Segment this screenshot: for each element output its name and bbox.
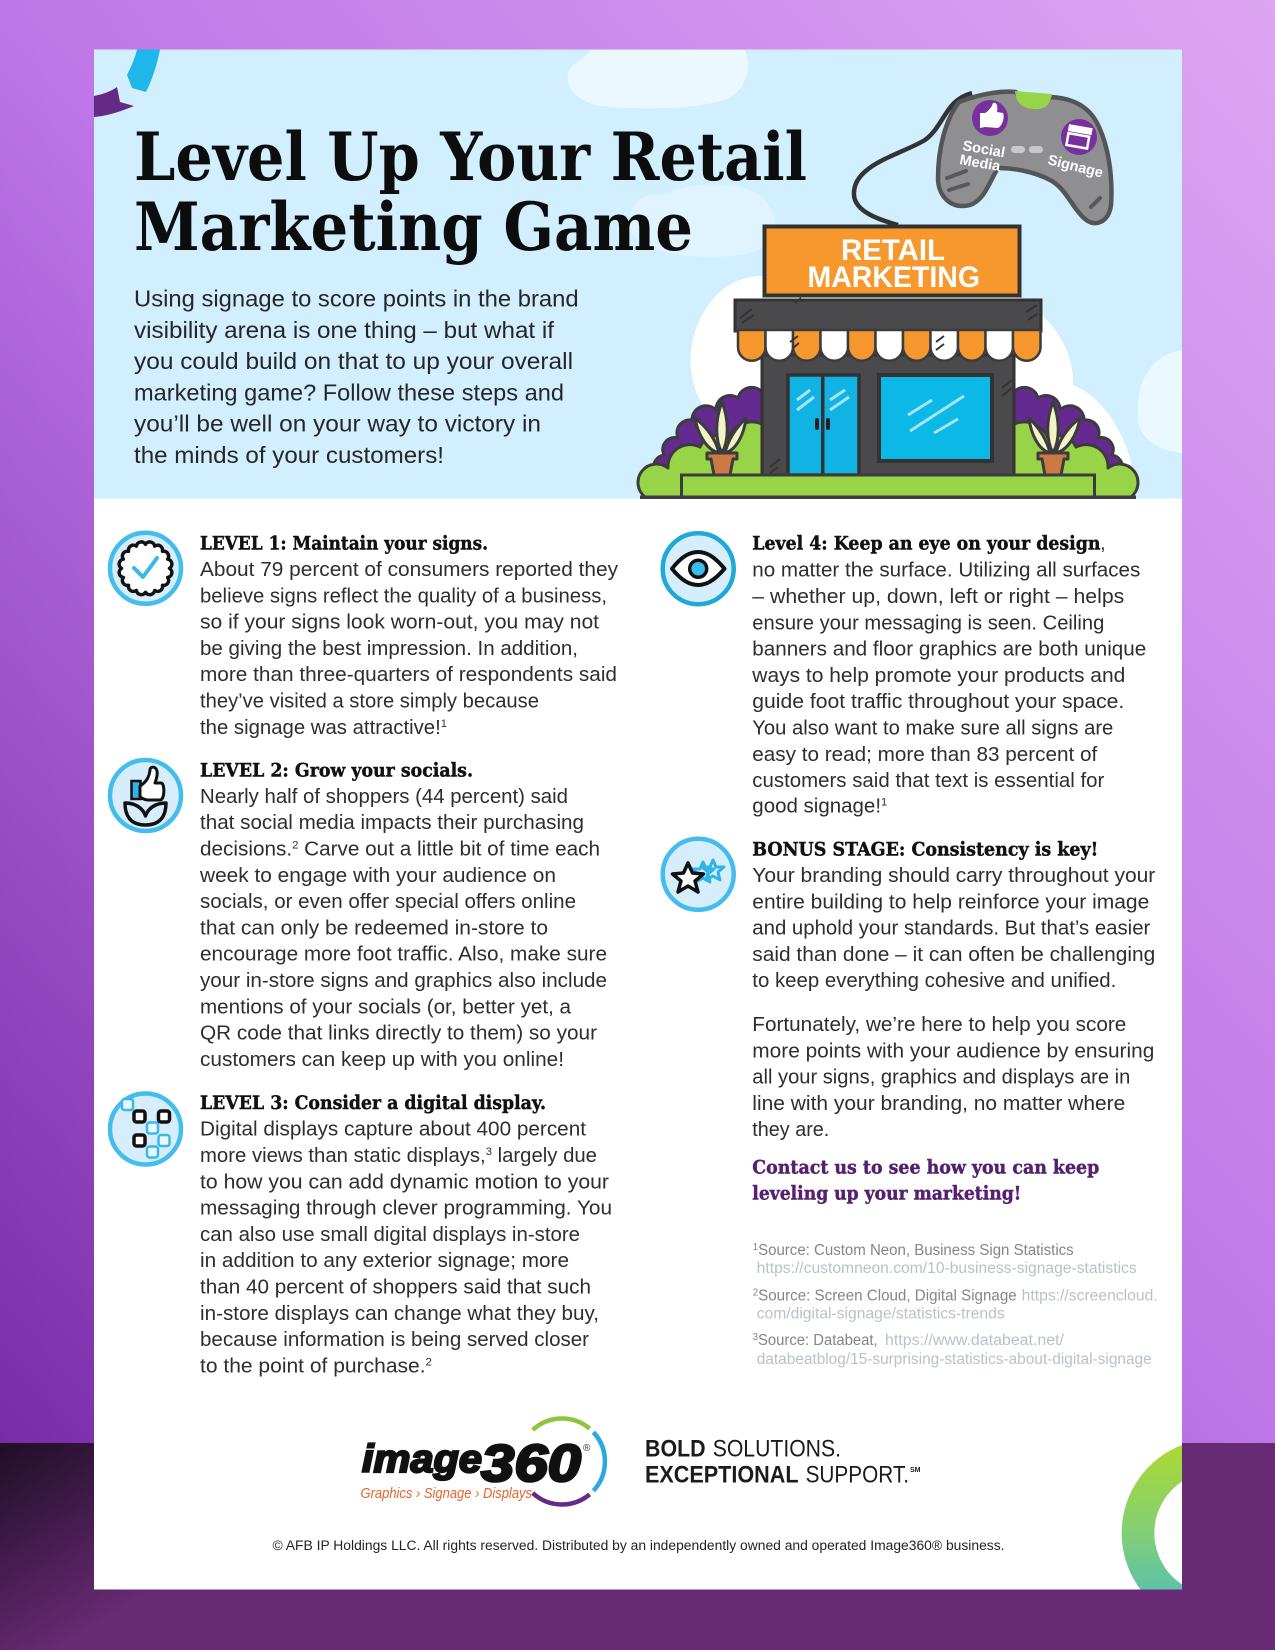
level 4 text: Level 4: Keep an eye on your design, <box>752 532 1105 554</box>
intro text: you’ll be well on your way to victory in <box>134 411 541 437</box>
level 4 text: ensure your messaging is seen. Ceiling <box>752 612 1104 634</box>
closing paragraph <box>752 1014 1154 1141</box>
level 4 text: – whether up, down, left or right – helps <box>752 586 1124 608</box>
background: dark floor <box>0 1443 1275 1650</box>
level 2 text: Nearly half of shoppers (44 percent) said <box>200 786 568 808</box>
sources: Source: Screen Cloud, Digital Signage <box>758 1288 1017 1305</box>
bushes left <box>638 387 762 497</box>
level 2 text: socials, or even offer special offers online <box>200 891 576 913</box>
tagline: SUPPORT. <box>806 1462 909 1489</box>
closing paragraph: Fortunately, we’re here to help you score <box>752 1014 1126 1036</box>
level 3 text: to how you can add dynamic motion to your <box>200 1171 609 1193</box>
level 1 text: believe signs reflect the quality of a business, <box>200 585 607 607</box>
intro text: you could build on that to up your overall <box>134 348 573 374</box>
icon: eye <box>663 533 734 604</box>
bonus stage text: entire building to help reinforce your image <box>752 891 1149 913</box>
level 3 text: largely due <box>492 1145 597 1167</box>
potted plant right <box>1029 402 1080 475</box>
icon: QR code squares <box>110 1094 181 1164</box>
level 4 block <box>663 532 1146 818</box>
level 4 text: 1 <box>881 797 887 809</box>
corner ring: green to teal <box>1122 1445 1182 1590</box>
building <box>762 355 1014 475</box>
level 4 text: good signage! <box>752 796 878 818</box>
white cloud behind store <box>640 276 1136 497</box>
sources: 1 <box>753 1242 759 1253</box>
roof band <box>735 300 1041 331</box>
level 3 text <box>200 1092 612 1377</box>
level 3 text: than 40 percent of shoppers said that such <box>200 1276 591 1298</box>
bonus stage text: and uphold your standards. But that’s easier <box>752 918 1151 940</box>
level 4 text <box>751 532 1146 818</box>
bonus stage text: BONUS STAGE: Consistency is key! <box>752 838 1098 860</box>
potted plant left <box>695 402 746 475</box>
game controller <box>938 91 1111 223</box>
bonus stage block <box>663 838 1156 992</box>
level 1 text: the signage was attractive! <box>200 717 437 739</box>
logo: image360: 360 <box>481 1435 581 1493</box>
controller labels: Media <box>958 152 1002 175</box>
level 2 text <box>199 759 607 1071</box>
sources: https://customneon.com/10-business-signage-statistics <box>757 1260 1137 1277</box>
sources: 2 <box>753 1288 759 1299</box>
level 2 text: Carve out a little bit of time each <box>298 838 600 860</box>
bushes right <box>1014 387 1138 497</box>
level 3 text: because information is being served closer <box>200 1329 589 1351</box>
level 2 text: decisions. <box>200 838 289 860</box>
level 2 text: week to engage with your audience on <box>199 865 556 887</box>
level 3 text: LEVEL 3: Consider a digital display. <box>200 1092 546 1114</box>
call to action: Contact us to see how you can keep <box>752 1156 1099 1178</box>
controller labels: Social <box>961 138 1006 161</box>
copyright line: © AFB IP Holdings LLC. All rights reserved. Distributed by an independently owned and operated Image360® business. <box>272 1538 1004 1553</box>
call to action <box>752 1156 1099 1204</box>
bonus stage text: to keep everything cohesive and unified. <box>752 970 1116 992</box>
ground step <box>682 475 1094 497</box>
logo: image360: Graphics › Signage › Displays <box>360 1485 532 1502</box>
ground line <box>640 496 1136 499</box>
level 4 text: easy to read; more than 83 percent of <box>752 744 1098 766</box>
panel: header banner <box>94 50 1182 498</box>
level 4 text: guide foot traffic throughout your space. <box>752 691 1124 713</box>
sources: 3 <box>753 1332 758 1343</box>
level 2 text: mentions of your socials (or, better yet, a <box>200 996 572 1018</box>
tagline: SOLUTIONS. <box>713 1436 841 1463</box>
level 1 text: 1 <box>441 718 447 730</box>
title: Level Up Your Retail <box>134 118 807 196</box>
level 3 text: more views than static displays, <box>200 1145 481 1167</box>
store sign: RETAIL <box>841 234 945 267</box>
tagline: SM <box>910 1467 921 1474</box>
level 4 text: ways to help promote your products and <box>751 665 1125 687</box>
level 3 text: in-store displays can change what they buy, <box>200 1303 599 1325</box>
tagline: BOLD <box>645 1436 706 1463</box>
level 2 text: 2 <box>292 840 298 852</box>
level 4 text: no matter the surface. Utilizing all surfaces <box>752 560 1140 582</box>
tagline <box>645 1436 921 1489</box>
closing paragraph: they are. <box>752 1119 829 1141</box>
bonus stage text: said than done – it can often be challenging <box>752 944 1155 966</box>
sources: com/digital-signage/statistics-trends <box>757 1306 1005 1322</box>
level 2 text: QR code that links directly to them) so your <box>200 1023 597 1045</box>
level 2 text: your in-store signs and graphics also include <box>200 970 607 992</box>
logo: image360: ® <box>583 1443 591 1454</box>
icon: seal with check mark <box>110 533 181 604</box>
level 3 block <box>110 1092 612 1377</box>
level 2 text: encourage more foot traffic. Also, make sure <box>200 944 607 966</box>
level 2 text: that can only be redeemed in-store to <box>200 917 548 939</box>
level 1 text: About 79 percent of consumers reported they <box>200 559 618 581</box>
level 3 text: 2 <box>426 1356 432 1368</box>
sources: https://www.databeat.net/ <box>885 1332 1065 1349</box>
closing paragraph: more points with your audience by ensuring <box>752 1040 1154 1062</box>
level 2 text: that social media impacts their purchasing <box>200 812 584 834</box>
level 2 text: customers can keep up with you online! <box>200 1049 564 1071</box>
controller labels: Signage <box>1046 152 1105 182</box>
logo: image360 <box>360 1419 605 1504</box>
closing paragraph: line with your branding, no matter where <box>752 1093 1125 1115</box>
intro text: Using signage to score points in the brand <box>134 286 579 312</box>
level 1 text <box>200 532 618 739</box>
clouds <box>568 50 1182 453</box>
corner ribbon: cyan and purple <box>94 50 160 117</box>
sources: Source: Custom Neon, Business Sign Statistics <box>758 1242 1074 1259</box>
icon: stars <box>663 839 734 910</box>
sources: Source: Databeat, <box>758 1332 878 1349</box>
logo: image360: image <box>362 1438 482 1481</box>
closing paragraph: all your signs, graphics and displays are in <box>752 1067 1130 1089</box>
intro text: visibility arena is one thing – but what if <box>134 317 554 343</box>
level 1 text: they’ve visited a store simply because <box>200 690 539 712</box>
button: social media thumb <box>972 100 1008 136</box>
level 3 text: 3 <box>486 1146 492 1158</box>
level 3 text: messaging through clever programming. You <box>200 1198 612 1220</box>
controller labels <box>958 138 1105 182</box>
call to action: leveling up your marketing! <box>752 1182 1021 1204</box>
sources <box>753 1242 1158 1368</box>
level 4 text: customers said that text is essential for <box>752 770 1105 792</box>
level 1 block <box>110 532 618 739</box>
level 2 block <box>110 759 607 1071</box>
level 1 text: be giving the best impression. In addition, <box>200 638 578 660</box>
icon: thumb and leaves <box>110 760 181 831</box>
tagline: EXCEPTIONAL <box>645 1462 798 1489</box>
bonus stage text <box>752 838 1156 992</box>
controller cable <box>854 93 972 225</box>
intro text <box>134 286 579 468</box>
sources: databeatblog/15-surprising-statistics-about-digital-signage <box>757 1351 1152 1368</box>
door <box>788 375 859 475</box>
title: Marketing Game <box>134 188 693 266</box>
title <box>134 118 807 266</box>
bonus stage text: Your branding should carry throughout your <box>752 865 1156 887</box>
level 4 text: You also want to make sure all signs are <box>752 718 1113 740</box>
intro text: marketing game? Follow these steps and <box>134 379 564 405</box>
level 3 text: can also use small digital displays in-store <box>200 1224 580 1246</box>
store sign: MARKETING <box>808 261 980 294</box>
window <box>879 375 992 461</box>
level 3 text: in addition to any exterior signage; more <box>200 1250 569 1272</box>
level 3 text: to the point of purchase. <box>200 1355 415 1377</box>
illustration: retail store with game controller <box>638 91 1138 499</box>
awning <box>738 330 1040 361</box>
button: signage <box>1061 119 1097 155</box>
store sign <box>764 226 1020 296</box>
intro text: the minds of your customers! <box>134 442 444 468</box>
level 3 text: Digital displays capture about 400 percent <box>200 1119 586 1141</box>
sources: https://screencloud. <box>1022 1288 1158 1305</box>
level 1 text: so if your signs look worn-out, you may not <box>200 612 599 634</box>
level 1 text: LEVEL 1: Maintain your signs. <box>200 532 488 554</box>
level 4 text: banners and floor graphics are both unique <box>752 639 1146 661</box>
level 2 text: LEVEL 2: Grow your socials. <box>200 759 473 781</box>
level 1 text: more than three-quarters of respondents said <box>200 664 617 686</box>
